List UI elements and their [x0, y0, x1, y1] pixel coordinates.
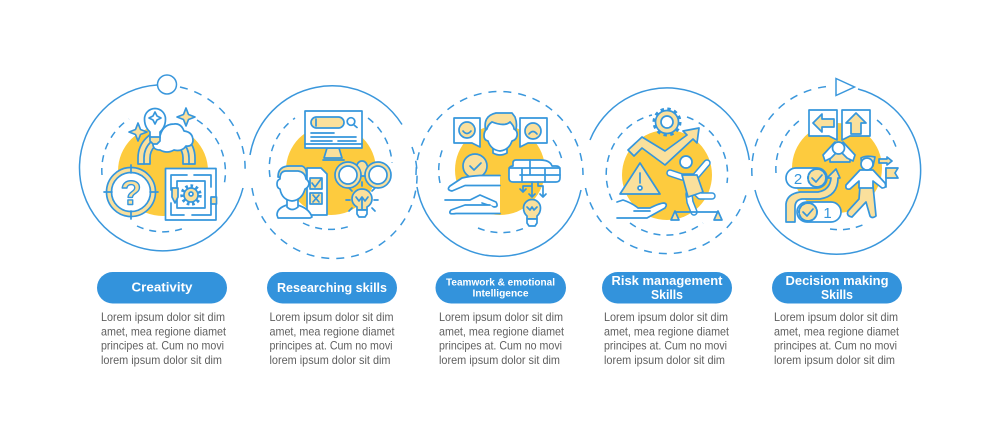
icon: warning triangle: [620, 163, 660, 194]
icon: question target: ?: [121, 174, 141, 212]
inner dashed ring: [776, 118, 897, 230]
icon: cloud: [153, 124, 193, 152]
icon: walking person with flag: [846, 156, 898, 218]
icon: star left: [129, 123, 147, 141]
panel: teamwork and emotional intelligence: [416, 92, 583, 256]
text block: teamwork: [439, 310, 565, 367]
icon: running figure: [670, 156, 712, 212]
icon: head: [484, 113, 517, 155]
icon: light bulb: [524, 200, 540, 226]
inner dashed ring: [269, 118, 392, 229]
icon: up arrow sign: [842, 110, 870, 140]
heading pill: researching skills: [267, 272, 397, 304]
text block: researching skills: lorem ipsum dolor sit dim: [270, 353, 391, 367]
icon: happy face bubble: [454, 118, 480, 147]
text block: decision making: lorem ipsum dolor sit dim: [774, 353, 895, 367]
icon: monitor: [305, 111, 362, 160]
icon: person: [277, 166, 312, 218]
heading pill: creativity: [97, 272, 227, 304]
inner dashed ring: [606, 115, 728, 235]
text block: risk management: Lorem ipsum dolor sit dim: [604, 310, 728, 324]
icon: decision: [786, 110, 898, 222]
heading pill: creativity: Creativity: [132, 280, 193, 294]
text block: creativity: amet, mea regione diamet: [101, 324, 227, 338]
icon: light bulb: [144, 109, 166, 144]
text block: decision making: Lorem ipsum dolor sit dim: [774, 310, 898, 324]
icon: gear: [654, 109, 680, 135]
text block: creativity: principes at. Cum no movi: [101, 339, 224, 353]
panel: risk management skills: [586, 88, 749, 254]
icon: left arrow sign: [809, 110, 837, 140]
heading pill: teamwork and emotional intelligence: [436, 272, 566, 304]
text block: researching skills: Lorem ipsum dolor sit dim: [270, 310, 394, 324]
icon: light bulb: [346, 182, 378, 217]
icon: risk: [617, 109, 722, 220]
yellow disc: [455, 125, 545, 215]
icon: check badge: [463, 154, 487, 178]
icon: open hand: [617, 200, 666, 218]
icon: upper hand: [448, 176, 500, 191]
icon: thinking person: [823, 142, 855, 162]
panel: decision making skills: [752, 78, 921, 254]
icon: lower hands: [445, 195, 500, 214]
text block: researching skills: amet, mea regione diamet: [270, 324, 395, 338]
icon: step pills and path: 1: [823, 205, 832, 222]
text block: decision making: principes at. Cum no movi: [774, 339, 897, 353]
text block: teamwork: lorem ipsum dolor sit dim: [439, 353, 560, 367]
text block: teamwork: Lorem ipsum dolor sit dim: [439, 310, 563, 324]
heading pill: teamwork and emotional intelligence: Teamwork & emotional: [446, 278, 555, 288]
icon: research: [277, 111, 391, 218]
outer ring: [250, 86, 417, 259]
outer ring: [586, 88, 749, 254]
text block: teamwork: principes at. Cum no movi: [439, 339, 562, 353]
panel: creativity: [79, 75, 245, 251]
icon: teamwork: [445, 113, 560, 226]
text block: decision making: [774, 310, 900, 367]
heading pill: decision making skills: Skills: [821, 287, 853, 302]
text block: creativity: [101, 310, 227, 367]
text block: decision making: amet, mea regione diamet: [774, 324, 900, 338]
heading pill: risk management skills: Risk management: [612, 273, 723, 288]
text block: researching skills: [270, 310, 395, 367]
text block: teamwork: amet, mea regione diamet: [439, 324, 565, 338]
text block: risk management: amet, mea regione diamet: [604, 324, 730, 338]
icon: step pills and path: 2: [794, 171, 802, 188]
heading pill: risk management skills: [602, 272, 732, 304]
heading pill: decision making skills: Decision making: [786, 273, 889, 288]
text block: creativity: Lorem ipsum dolor sit dim: [101, 310, 225, 324]
icon: binoculars: [335, 161, 391, 188]
heading pill: researching skills: Researching skills: [277, 280, 387, 295]
panel: researching skills: [250, 86, 417, 259]
outer ring with marker: [79, 75, 245, 251]
icon: brick wall: [509, 160, 560, 182]
icon: white backing of hands: [446, 186, 500, 214]
outer ring with arrow marker: [752, 78, 921, 254]
inner dashed ring: [439, 140, 562, 233]
icon: creativity: [104, 108, 216, 220]
icon: down arrows: [520, 182, 546, 197]
text block: risk management: principes at. Cum no movi: [604, 339, 727, 353]
heading pill: teamwork and emotional intelligence: Intelligence: [472, 288, 529, 300]
yellow disc: [622, 130, 712, 220]
inner dashed ring: [102, 119, 225, 232]
text block: researching skills: principes at. Cum no movi: [270, 339, 392, 353]
yellow disc: [118, 126, 208, 216]
yellow disc: [792, 123, 882, 213]
icon: tightrope: [671, 211, 722, 220]
icon: checklist: [307, 168, 327, 215]
text block: risk management: [604, 310, 730, 367]
outer ring: [416, 92, 583, 256]
text block: creativity: lorem ipsum dolor sit dim: [101, 353, 222, 367]
yellow disc: [286, 125, 376, 215]
heading pill: risk management skills: Skills: [651, 287, 683, 302]
icon: zigzag arrow: [628, 128, 699, 165]
icon: rainbow: [138, 130, 195, 164]
icon: maze blueprint: [166, 168, 216, 220]
icon: step pills and path: [786, 168, 841, 222]
text block: risk management: lorem ipsum dolor sit dim: [604, 353, 725, 367]
heading pill: decision making skills: [772, 272, 902, 304]
icon: star right: [177, 108, 195, 126]
icon: sad face bubble: [520, 118, 547, 147]
